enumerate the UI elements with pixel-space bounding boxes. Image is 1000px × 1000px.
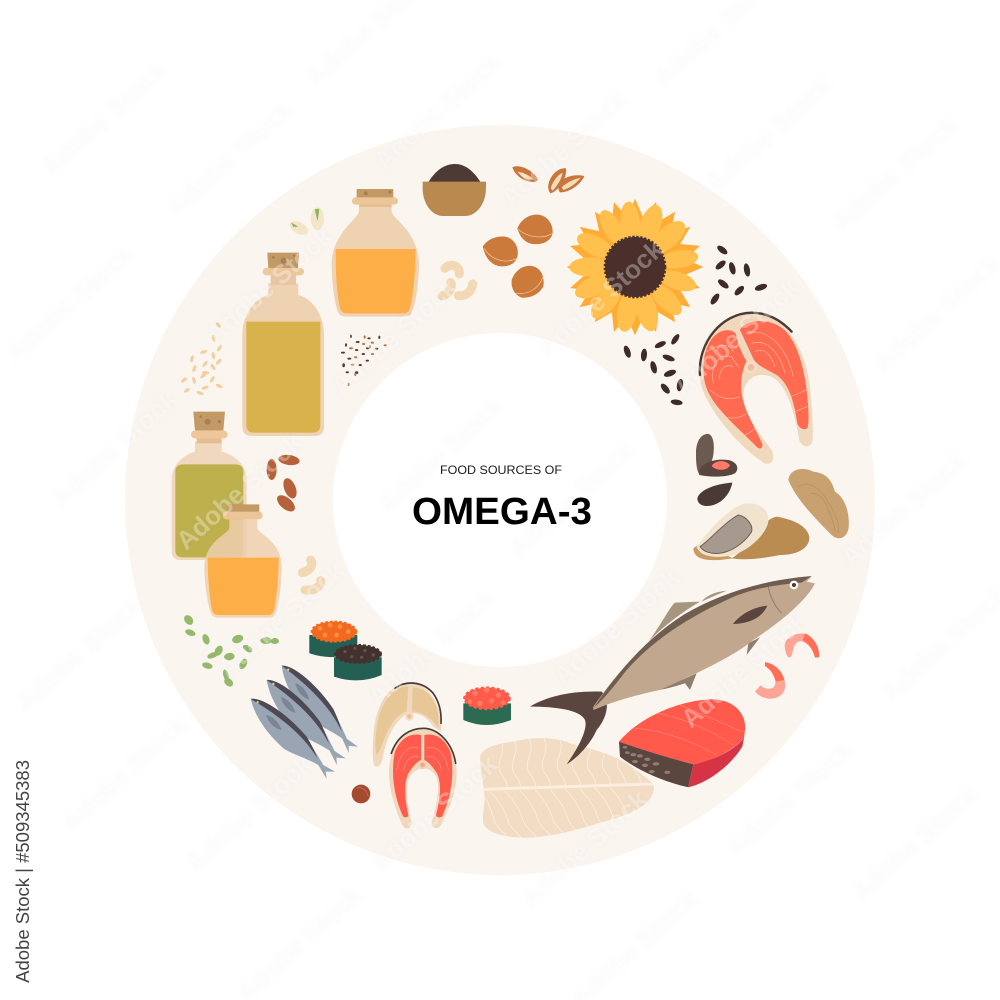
watermark: Adobe Stock — [35, 54, 173, 183]
tuna steak — [619, 699, 745, 787]
small orange bottle — [204, 504, 282, 618]
top honey bottle — [332, 189, 419, 317]
brazil nuts — [512, 166, 584, 193]
flax seeds — [341, 335, 387, 386]
watermark: Adobe Stock — [720, 734, 858, 863]
hazelnuts — [483, 215, 553, 298]
red caviar cup — [463, 687, 511, 725]
cashews top — [442, 265, 473, 296]
watermark: Adobe Stock — [10, 589, 148, 718]
watermark: Adobe Stock — [531, 234, 669, 363]
watermark: Adobe Stock — [362, 583, 500, 712]
watermark: Adobe Stock — [212, 555, 350, 684]
watermark: Adobe Stock — [503, 435, 641, 564]
oysters — [693, 469, 849, 560]
watermark: Adobe Stock — [825, 109, 963, 238]
title: food sources of: FOOD SOURCES OF — [440, 465, 562, 477]
sesame seeds — [180, 321, 223, 396]
green pumpkin seeds — [182, 613, 279, 688]
watermark: Adobe Stock — [55, 709, 193, 838]
watermark: Adobe Stock — [325, 272, 463, 401]
watermark: Adobe Stock — [160, 94, 298, 223]
title: omega-3: OMEGA-3 — [412, 491, 592, 533]
large salmon steak — [700, 313, 813, 464]
watermark: Adobe Stock — [372, 390, 510, 519]
stock id credit: Adobe Stock | #509345383 — [12, 760, 33, 983]
watermark: Adobe Stock — [495, 84, 633, 213]
watermark: Adobe Stock — [200, 221, 338, 350]
green bottle — [172, 412, 247, 560]
watermark: Adobe Stock — [675, 605, 813, 734]
watermark: Adobe Stock — [835, 444, 973, 573]
watermark: Adobe Stock — [845, 779, 983, 908]
almonds — [267, 454, 300, 515]
mussels — [696, 434, 737, 506]
pistachios — [287, 207, 324, 238]
watermark: Adobe Stock — [0, 239, 138, 368]
cashews lower — [302, 560, 321, 590]
shrimps — [755, 633, 819, 699]
fish fillet — [480, 734, 654, 840]
watermark: Adobe Stock — [180, 749, 318, 878]
watermark: Adobe Stock — [667, 272, 805, 401]
hazelnut bottom — [352, 785, 370, 803]
watermark: Adobe Stock — [547, 562, 685, 691]
watermark: Adobe Stock — [368, 47, 506, 176]
seed bowl — [423, 164, 486, 216]
sunflower seeds — [622, 244, 768, 406]
ring background — [125, 125, 875, 875]
sunflower — [565, 197, 705, 337]
watermark: Adobe Stock — [515, 784, 653, 913]
watermark: Adobe Stock — [700, 69, 838, 198]
watermark: Adobe Stock — [170, 427, 308, 556]
red salmon steak — [389, 728, 457, 828]
watermark: Adobe Stock — [45, 384, 183, 513]
pale salmon steak — [373, 683, 441, 767]
sardines — [251, 665, 366, 779]
orange and black caviar cups — [309, 622, 382, 680]
tall olive oil bottle — [242, 253, 324, 436]
watermark: Adobe Stock — [365, 749, 503, 878]
tuna fish — [530, 576, 815, 764]
